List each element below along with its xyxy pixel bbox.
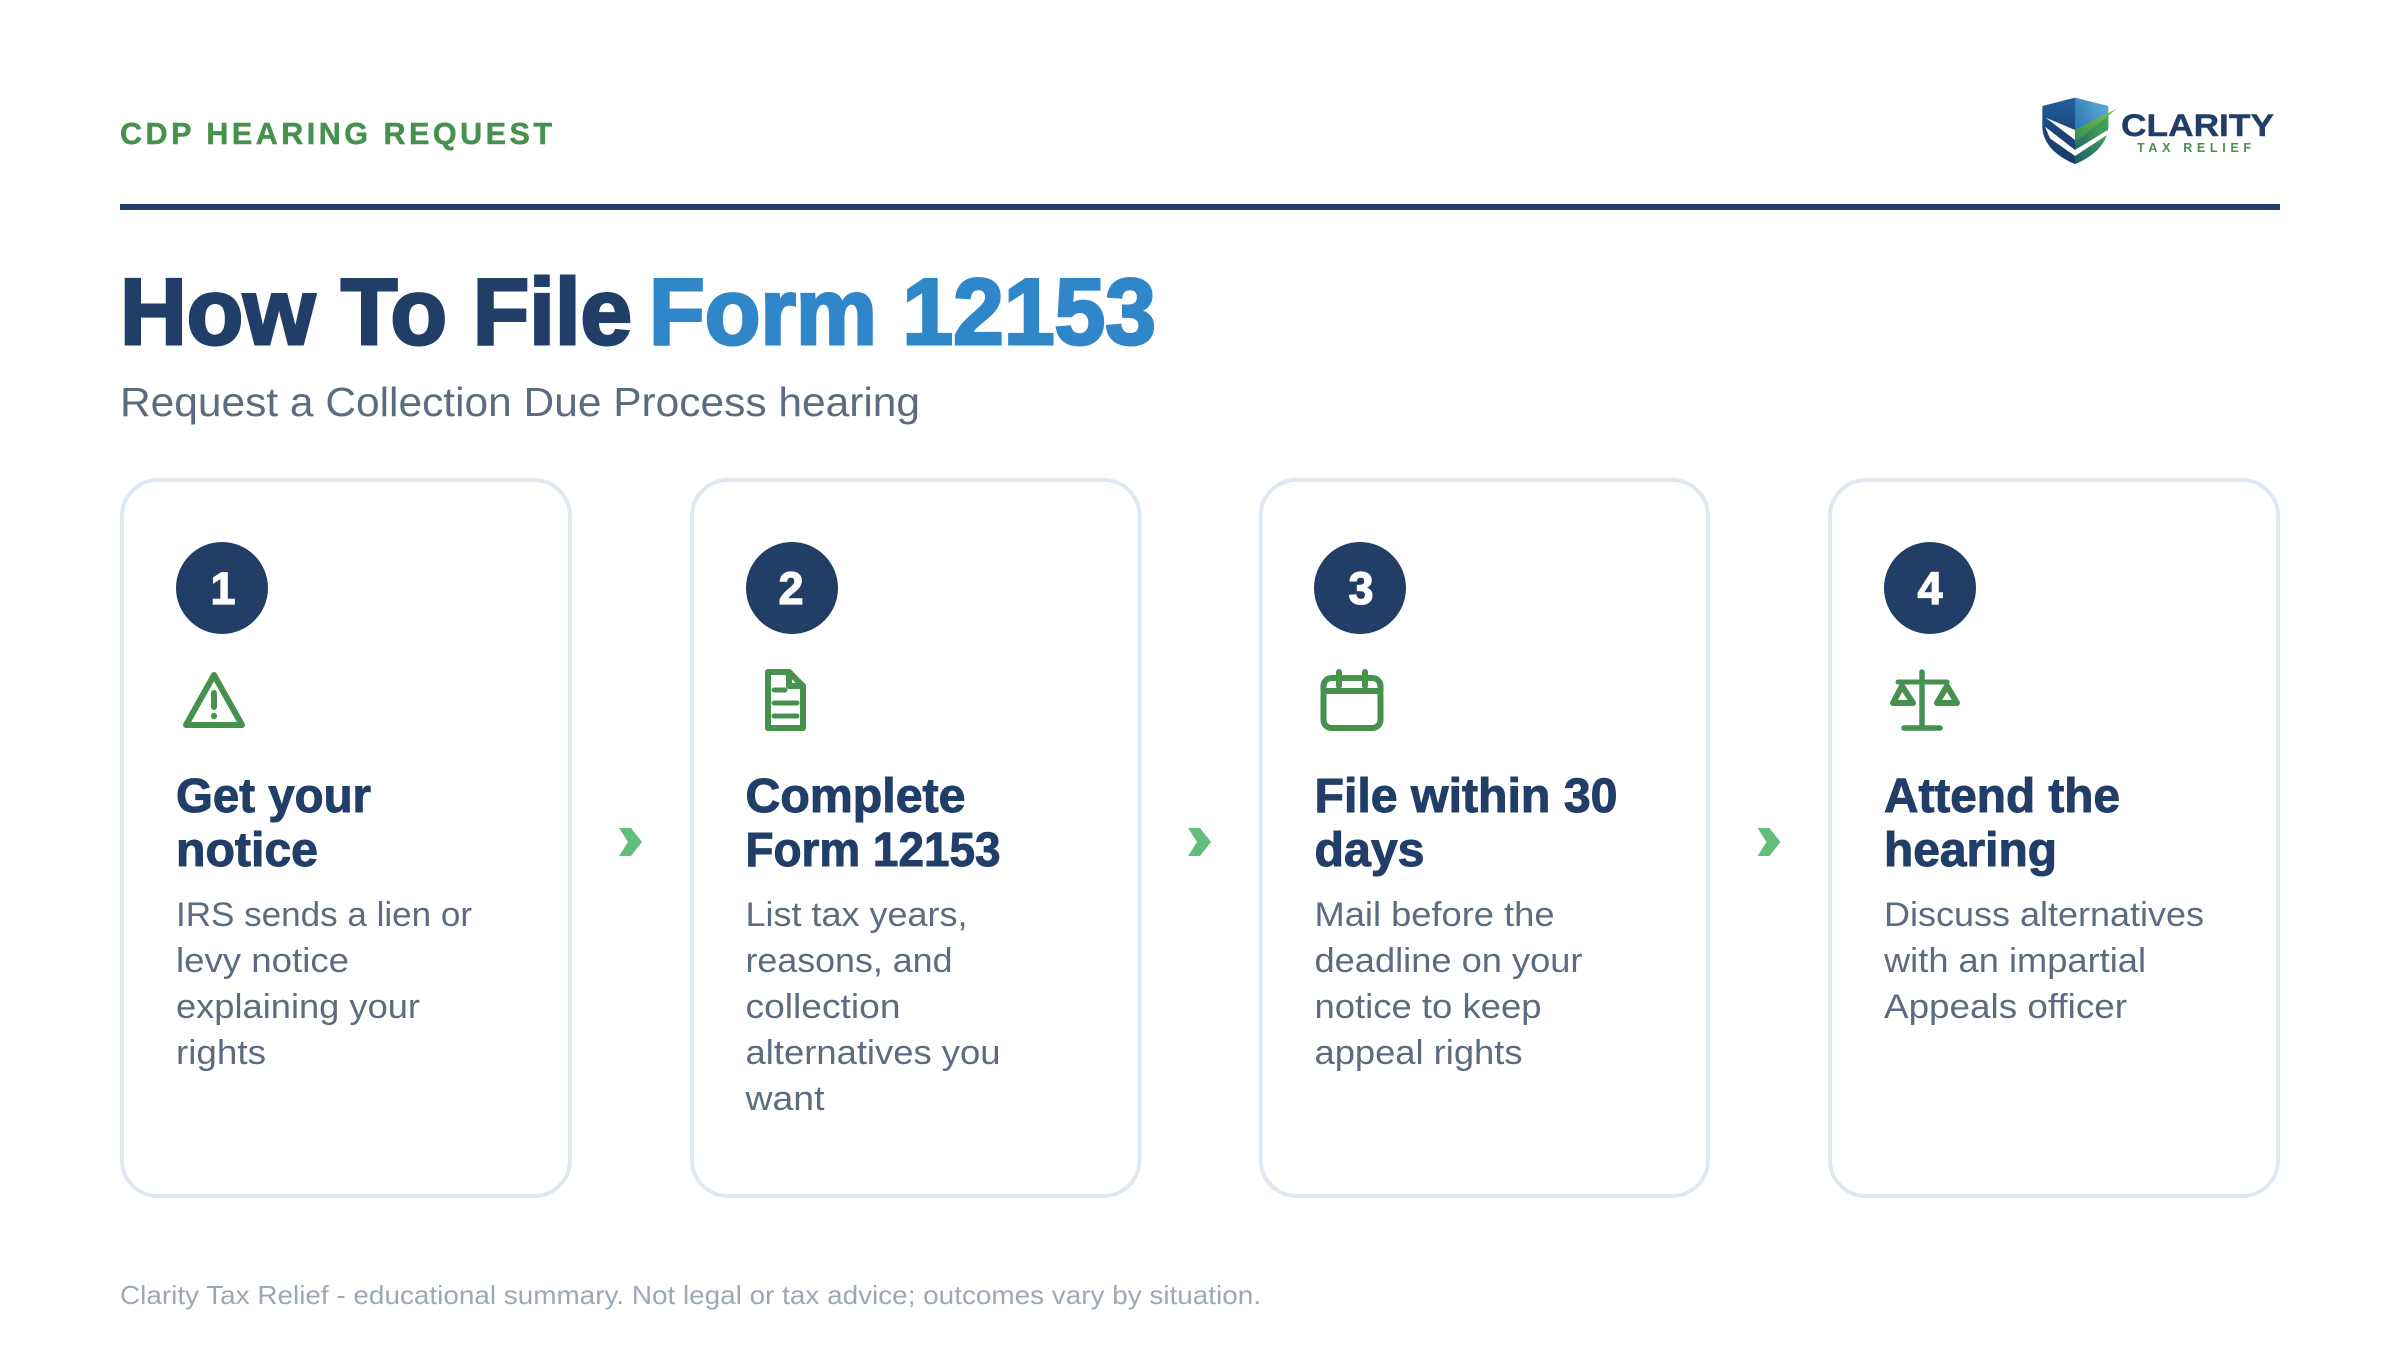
step number 3: 3 [1348, 563, 1374, 614]
heading: step 2: Form 12153 [746, 824, 1000, 877]
heading: step 1: Get your [176, 770, 371, 823]
description: step 4 [1883, 896, 2204, 1026]
icon: document [768, 672, 803, 728]
step number 4: 4 [1917, 563, 1943, 614]
heading: step 4: hearing [1884, 824, 2057, 877]
heading: step 1: notice [176, 824, 318, 877]
description: step 4: Discuss alternatives [1884, 896, 2204, 934]
description: step 2: want [744, 1080, 825, 1118]
step number 2 [746, 542, 838, 634]
description: step 2 [744, 896, 1000, 1118]
panel: step 4 [1830, 480, 2278, 1196]
description: step 3 [1314, 896, 1582, 1072]
title [120, 259, 1156, 364]
step number 1: 1 [210, 563, 236, 614]
header rule [120, 204, 2280, 210]
description: step 2: List tax years, [746, 896, 968, 934]
title: How To File [120, 259, 632, 364]
icon: warning triangle [186, 675, 242, 725]
step number 1 [176, 542, 268, 634]
heading: step 2 [746, 770, 1000, 877]
heading: step 1 [176, 770, 371, 877]
arrow 2 to 3 [1188, 828, 1211, 856]
logo tagline: TAX RELIEF [2137, 141, 2251, 155]
description: step 1: explaining your [176, 988, 420, 1026]
heading: step 2: Complete [746, 770, 966, 823]
icon: shield with check [2042, 98, 2117, 164]
description: step 3: notice to keep [1314, 988, 1542, 1026]
step number 3 [1314, 542, 1406, 634]
description: step 1 [176, 896, 472, 1072]
description: step 3: deadline on your [1314, 942, 1582, 980]
subtitle: Request a Collection Due Process hearing [120, 379, 920, 425]
description: step 4: with an impartial [1883, 942, 2146, 980]
logo: Clarity Tax Relief [2042, 98, 2274, 164]
arrow 3 to 4 [1758, 828, 1780, 856]
step number 2: 2 [778, 563, 804, 614]
title: Form 12153 [649, 259, 1156, 364]
icon: balance scale [1893, 672, 1957, 728]
panel: step 2 [692, 480, 1140, 1196]
description: step 3: Mail before the [1314, 896, 1554, 934]
panel: step 1 [122, 480, 570, 1196]
description: step 1: levy notice [176, 942, 349, 980]
description: step 1: IRS sends a lien or [176, 896, 472, 934]
heading: step 3: days [1314, 824, 1424, 877]
description: step 1: rights [176, 1034, 266, 1072]
description: step 2: collection [746, 988, 900, 1026]
logo wordmark: CLARITY [2121, 107, 2274, 143]
panel: step 3 [1261, 480, 1708, 1196]
description: step 4: Appeals officer [1884, 988, 2127, 1026]
description: step 2: alternatives you [746, 1034, 1000, 1072]
heading: step 4 [1884, 770, 2120, 877]
description: step 2: reasons, and [746, 942, 952, 980]
icon: calendar [1324, 672, 1380, 728]
heading: step 4: Attend the [1884, 770, 2120, 823]
footer disclaimer: Clarity Tax Relief - educational summary. Not legal or tax advice; outcomes vary by situation. [120, 1280, 1261, 1310]
description: step 3: appeal rights [1314, 1034, 1522, 1072]
eyebrow heading: CDP HEARING REQUEST [120, 117, 552, 151]
arrow 1 to 2 [619, 828, 642, 856]
heading: step 3 [1314, 770, 1618, 877]
step number 4 [1884, 542, 1976, 634]
heading: step 3: File within 30 [1314, 770, 1618, 823]
